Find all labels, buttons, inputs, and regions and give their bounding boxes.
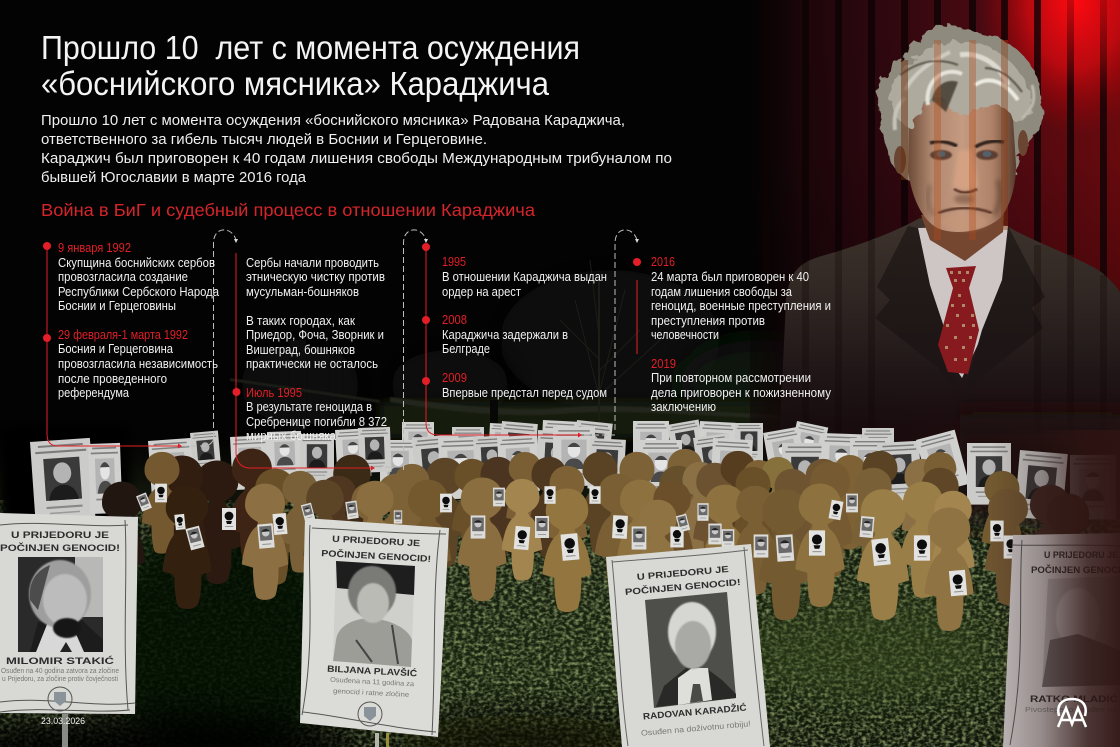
hair highlights bbox=[895, 52, 1034, 130]
timeline column 2: мирных бошняка bbox=[246, 429, 336, 443]
portrait photo bbox=[333, 561, 415, 667]
poster: Ratko Mladic: U PRIJEDORU JE bbox=[1044, 550, 1118, 560]
poster: Ratko Mladic: RATKO MLADIĆ bbox=[1030, 693, 1118, 705]
timeline column 4: При повторном рассмотрении bbox=[651, 371, 811, 385]
timeline column 1: Республики Сербского Народа bbox=[58, 285, 219, 299]
title: «боснийского мясника» Караджича bbox=[41, 65, 550, 102]
stripes across portrait bbox=[802, 40, 1107, 445]
poster: Ratko Mladic: Pivostepeno osuđen na bbox=[1025, 707, 1117, 714]
poster: Radovan Karadzic: POČINJEN GENOCID! bbox=[624, 576, 741, 597]
hair back bbox=[877, 23, 1042, 178]
timeline column 3: Белграде bbox=[442, 342, 490, 356]
poster: Milomir Stakic: U PRIJEDORU JE bbox=[11, 530, 109, 540]
suit bbox=[778, 218, 1120, 470]
timeline column 1: 9 января 1992 bbox=[58, 241, 131, 255]
timeline column 4: 24 марта был приговорен к 40 bbox=[651, 270, 809, 284]
shirt bbox=[918, 226, 1008, 378]
intro paragraph: Караджич был приговорен к 40 годам лишения свободы Международным трибуналом по bbox=[41, 150, 672, 167]
timeline column 1: Скупщина боснийских сербов bbox=[58, 256, 215, 270]
timeline column 1 bbox=[58, 241, 219, 400]
right edge dark fade bbox=[990, 430, 1120, 747]
timeline column 4 bbox=[651, 255, 832, 414]
poster: Radovan Karadzic: Osuđen na doživotnu robiju! bbox=[641, 719, 751, 738]
poster: Biljana Plavsic: Osuđena na 11 godina za bbox=[330, 677, 414, 688]
poster: Milomir Stakic: u Prijedoru, za zločine protiv čovječnosti bbox=[2, 676, 118, 683]
poster: Milomir Stakic: POČINJEN GENOCID! bbox=[0, 542, 120, 553]
poster: Biljana Plavsic: POČINJEN GENOCID! bbox=[321, 547, 431, 564]
timeline column 1: референдума bbox=[58, 386, 129, 400]
timeline column 4: человечности bbox=[651, 328, 719, 342]
timeline dots bbox=[43, 242, 641, 396]
poster: Ratko Mladic bbox=[1003, 533, 1120, 747]
photo: Karadzic portrait bbox=[778, 23, 1120, 470]
poster: Milomir Stakic: MILOMIR STAKIĆ bbox=[6, 655, 115, 666]
portrait photo bbox=[18, 557, 103, 652]
brows and eyes bbox=[930, 141, 1004, 160]
timeline column 3: Караджича задержали в bbox=[442, 328, 568, 342]
timeline column 1: 29 февраля-1 марта 1992 bbox=[58, 328, 188, 342]
poster: Biljana Plavsic: genocid i ratne zločine bbox=[333, 688, 409, 699]
timeline column 4: заключению bbox=[651, 400, 716, 414]
timeline column 2: Вишеград, бошняков bbox=[246, 343, 355, 357]
emblem bbox=[48, 687, 72, 711]
poster: Biljana Plavsic: BILJANA PLAVŠIĆ bbox=[327, 663, 418, 678]
lapels bbox=[875, 226, 960, 400]
timeline column 4: преступления против bbox=[651, 314, 765, 328]
timeline connectors bbox=[47, 230, 637, 470]
date: 23.03.2026 bbox=[41, 716, 85, 726]
cut-out child figures bbox=[99, 449, 1093, 631]
timeline column 4: 2019 bbox=[651, 357, 676, 371]
poster: Milomir Stakic bbox=[0, 513, 138, 747]
intro paragraph: бывшей Югославии в марте 2016 года bbox=[41, 169, 307, 186]
timeline column 1: Босния и Герцеговина bbox=[58, 342, 173, 356]
ears bbox=[894, 146, 906, 174]
timeline column 1: после проведенного bbox=[58, 372, 167, 386]
photo tags on figures bbox=[136, 484, 1018, 596]
timeline column 2: В результате геноцида в bbox=[246, 400, 372, 414]
intro paragraph: Прошло 10 лет с момента осуждения «боснийского мясника» Радована Караджича, bbox=[41, 112, 625, 129]
timeline column 4: 2016 bbox=[651, 255, 675, 269]
portrait sketch bbox=[1042, 576, 1120, 687]
timeline column 2: Июль 1995 bbox=[246, 386, 302, 400]
timeline column 2: Сребренице погибли 8 372 bbox=[246, 415, 387, 429]
timeline column 3: В отношении Караджича выдан bbox=[442, 270, 607, 284]
icon: agency logo bbox=[1058, 699, 1086, 727]
timeline column 1: провозгласила создание bbox=[58, 270, 188, 284]
timeline column 3: 1995 bbox=[442, 255, 466, 269]
back row of posters bbox=[30, 419, 1116, 526]
poster: Radovan Karadzic: RADOVAN KARADŽIĆ bbox=[642, 701, 748, 722]
timeline column 2: В таких городах, как bbox=[246, 314, 355, 328]
hair top bbox=[890, 42, 1032, 128]
timeline column 1: Боснии и Герцеговины bbox=[58, 299, 176, 313]
red backdrop with stripes bbox=[750, 0, 1120, 520]
timeline column 2: мусульман-бошняков bbox=[246, 285, 359, 299]
neck bbox=[921, 210, 1004, 261]
timeline column 2: Сербы начали проводить bbox=[246, 256, 379, 270]
title bbox=[41, 29, 580, 102]
tie bbox=[938, 266, 979, 374]
timeline column 3: 2008 bbox=[442, 313, 467, 327]
timeline column 1: провозгласила независимость bbox=[58, 357, 218, 371]
nose and mouth bbox=[928, 150, 1000, 230]
poster: Radovan Karadzic bbox=[606, 544, 770, 747]
timeline column 4: годам лишения свободы за bbox=[651, 285, 792, 299]
timeline column 4: геноцид, военные преступления и bbox=[651, 299, 831, 313]
emblem bbox=[358, 702, 382, 726]
section heading: Война в БиГ и судебный процесс в отношении Караджича bbox=[41, 200, 535, 220]
timeline column 2: Приедор, Фоча, Зворник и bbox=[246, 328, 384, 342]
poster: Biljana Plavsic: U PRIJEDORU JE bbox=[332, 534, 420, 548]
poster: Biljana Plavsic bbox=[300, 518, 449, 747]
timeline column 3: 2009 bbox=[442, 371, 467, 385]
timeline column 4: дела приговорен к пожизненному bbox=[651, 386, 832, 400]
intro paragraph: ответственного за гибель тысяч людей в Боснии и Герцеговине. bbox=[41, 131, 487, 148]
intro paragraph bbox=[41, 112, 672, 186]
poster: Radovan Karadzic: U PRIJEDORU JE bbox=[636, 564, 729, 582]
timeline column 2: этническую чистку против bbox=[246, 270, 385, 284]
portrait photo bbox=[645, 592, 736, 708]
timeline column 3: ордер на арест bbox=[442, 285, 521, 299]
face bbox=[908, 99, 1016, 232]
timeline column 2 bbox=[246, 256, 387, 443]
grass field bbox=[0, 395, 1120, 747]
timeline column 2: практически не осталось bbox=[246, 357, 378, 371]
timeline column 3: Впервые предстал перед судом bbox=[442, 386, 607, 400]
timeline arrowheads bbox=[178, 239, 639, 470]
title: Прошло 10 лет с момента осуждения bbox=[41, 29, 580, 66]
poster: Milomir Stakic: Osuđen na 40 godina zatvora za zločine bbox=[1, 668, 119, 675]
timeline column 3 bbox=[442, 255, 607, 400]
